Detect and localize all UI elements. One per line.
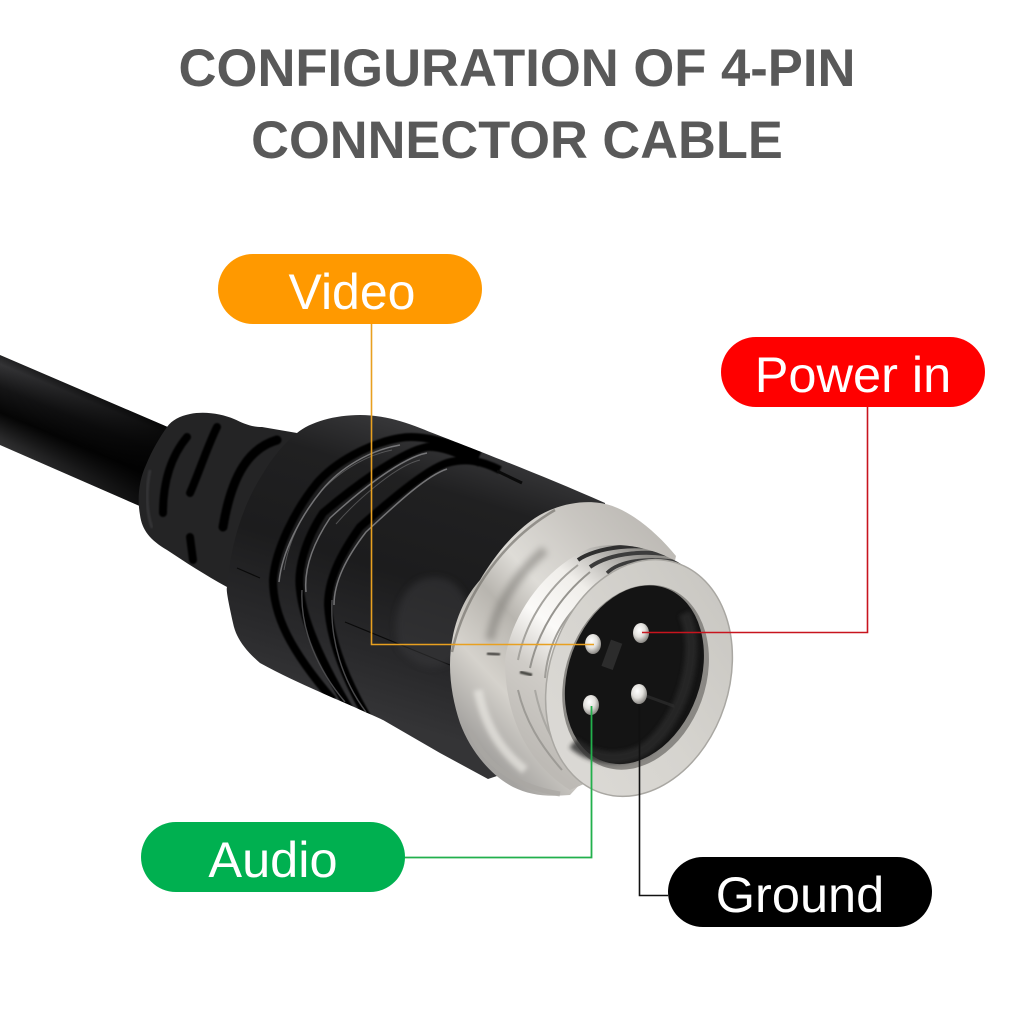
label: power in (721, 337, 985, 407)
connector cable photo illustration (0, 355, 762, 821)
label: video: Video (289, 264, 415, 320)
pin: audio (583, 695, 599, 715)
body ribs (273, 437, 500, 725)
title: CONNECTOR CABLE (251, 112, 783, 170)
cable (0, 355, 170, 507)
label: audio: Audio (208, 831, 338, 888)
label: power in: Power in (755, 346, 951, 403)
leader line: ground (640, 706, 668, 896)
label: ground (668, 857, 932, 927)
pin: power (633, 623, 649, 643)
leader line: power in (642, 407, 868, 632)
threaded neck (487, 545, 690, 790)
leader line: audio (404, 706, 592, 858)
front ring (516, 535, 762, 821)
pin: ground (631, 684, 647, 704)
socket cavity (537, 564, 734, 790)
label: audio (141, 822, 405, 892)
moulded body (227, 415, 620, 779)
metal back flange (450, 502, 676, 796)
strain relief boot (139, 413, 297, 590)
title: CONFIGURATION OF 4-PIN (179, 39, 855, 98)
label: video (218, 254, 482, 324)
title (179, 39, 855, 170)
pin: video (585, 634, 601, 654)
leader line: video (372, 324, 594, 644)
label: ground: Ground (716, 866, 884, 923)
